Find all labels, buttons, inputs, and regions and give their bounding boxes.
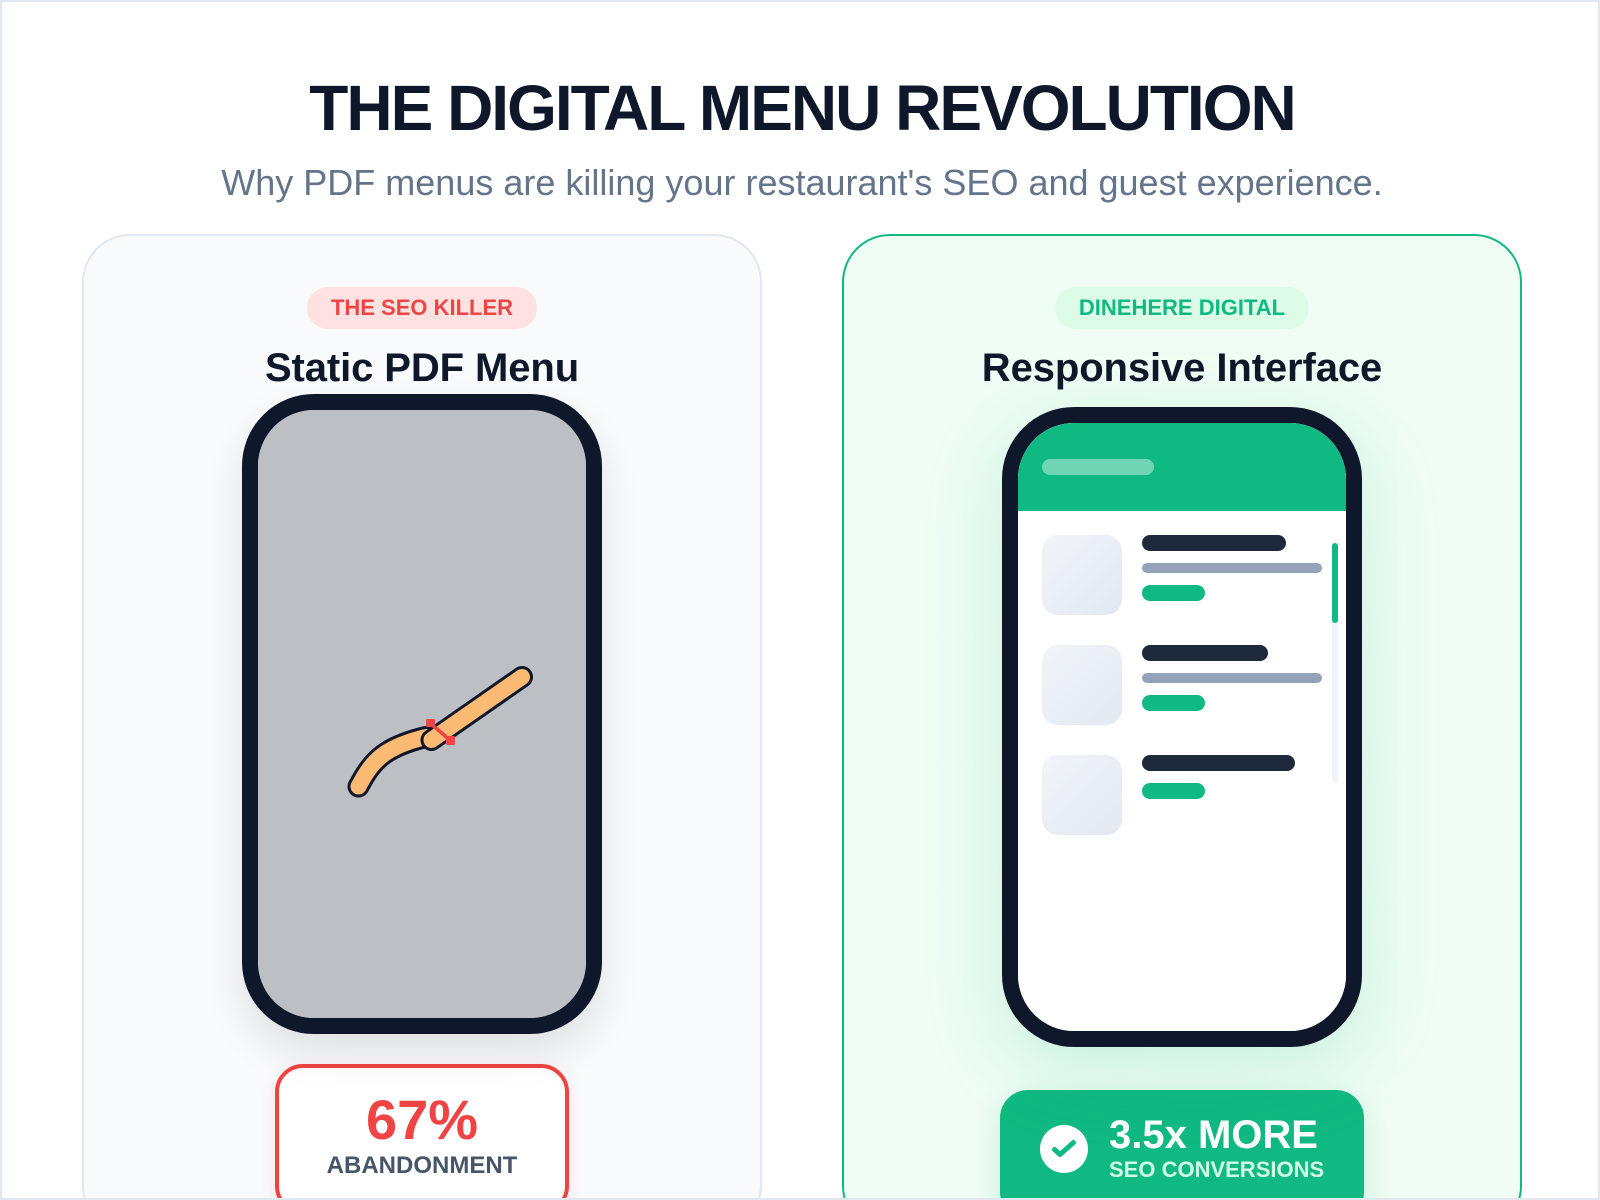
badge: DineHere Digital: DINEHERE DIGITAL: [1079, 295, 1285, 320]
badge: the SEO killer: THE SEO KILLER: [331, 295, 513, 320]
stat label: ABANDONMENT: [327, 1152, 517, 1179]
stat number: 67%: [366, 1088, 478, 1151]
icon: check circle: [1040, 1125, 1088, 1173]
app header: [1018, 423, 1346, 511]
stat: 67% abandonment: [275, 1064, 569, 1200]
icon: pinch hand gesture: [348, 666, 533, 798]
phone: static PDF: [242, 394, 602, 1034]
phone: responsive menu: [1002, 407, 1362, 1047]
menu item 1: [1042, 535, 1322, 615]
badge: the SEO killer: [307, 287, 537, 329]
stat label: SEO CONVERSIONS: [1109, 1157, 1324, 1182]
menu item 3: [1042, 755, 1295, 835]
heading: responsive interface: Responsive Interface: [982, 346, 1382, 390]
stat number: 3.5x MORE: [1109, 1113, 1318, 1157]
badge: DineHere Digital: [1055, 287, 1309, 329]
scrollbar thumb: [1332, 543, 1338, 623]
scrollbar: [1332, 543, 1338, 783]
header title bar: [1042, 459, 1154, 475]
title: THE DIGITAL MENU REVOLUTION: [309, 72, 1295, 144]
stat: 3.5x more SEO conversions: [1000, 1090, 1364, 1200]
heading: static PDF menu: Static PDF Menu: [265, 346, 579, 390]
panel: static PDF menu: [82, 234, 762, 1200]
menu item 2: [1042, 645, 1322, 725]
panel: responsive interface: [842, 234, 1522, 1200]
subtitle: Why PDF menus are killing your restaurant's SEO and guest experience.: [221, 162, 1383, 203]
phone screen: grey PDF: [258, 410, 586, 1018]
